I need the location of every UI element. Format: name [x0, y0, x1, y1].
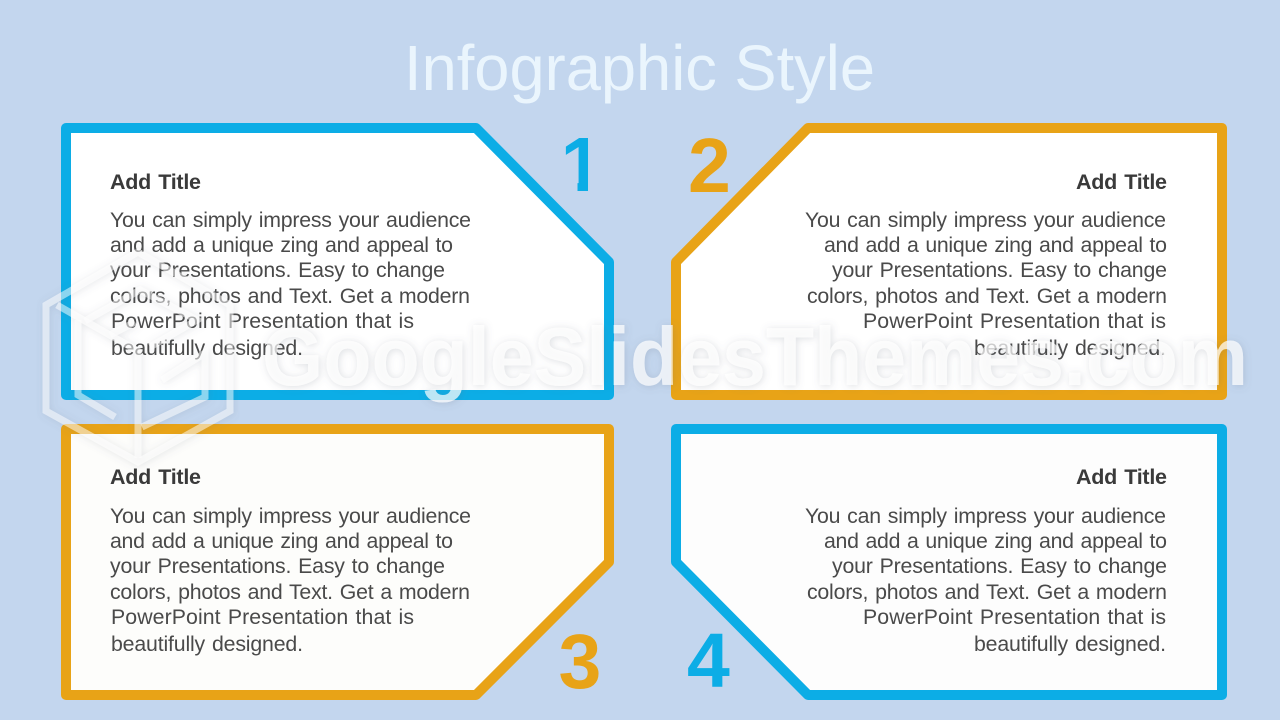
panel 1 body text: and add a unique zing and appeal to: [110, 233, 453, 257]
panel 2 body text: beautifully designed.: [974, 336, 1166, 360]
panel 3: [66, 429, 609, 705]
panel 4 body text: your Presentations. Easy to change: [832, 554, 1167, 578]
panel 1 heading: Add Title: [110, 170, 201, 194]
panel 2 number: 2: [688, 123, 731, 209]
panel 2 outline: [676, 128, 1222, 395]
panel 1 body text: You can simply impress your audience: [110, 208, 471, 232]
panel 2 body text: PowerPoint Presentation that is: [863, 309, 1166, 333]
panel 2 body text: You can simply impress your audience: [805, 208, 1166, 232]
panel 4 body text: colors, photos and Text. Get a modern: [807, 580, 1167, 604]
panel 1: [66, 122, 609, 395]
panel 4: [676, 429, 1222, 704]
panel 4 body text: PowerPoint Presentation that is: [863, 605, 1166, 629]
panel 1 body text: beautifully designed.: [111, 336, 303, 360]
panel 1 body text: [110, 208, 471, 360]
panel 1 body text: colors, photos and Text. Get a modern: [110, 284, 470, 308]
panel 2 body text: and add a unique zing and appeal to: [824, 233, 1167, 257]
panel 1 body text: your Presentations. Easy to change: [110, 258, 445, 282]
panel 2 body text: your Presentations. Easy to change: [832, 258, 1167, 282]
panel 3 body text: [110, 504, 471, 656]
panel 3 outline: [66, 429, 609, 695]
panel 4 outline: [676, 429, 1222, 695]
panel 3 number: 3: [558, 619, 601, 705]
panel 3 heading: Add Title: [110, 465, 201, 489]
watermark text: GoogleSlidesThemes.com: [262, 310, 1248, 403]
panel 4 body text: beautifully designed.: [974, 632, 1166, 656]
panel 3 body text: You can simply impress your audience: [110, 504, 471, 528]
panel 4 body text: [805, 504, 1167, 656]
panel 2 body text: colors, photos and Text. Get a modern: [807, 284, 1167, 308]
panel 2 heading: Add Title: [1076, 170, 1167, 194]
panel 4 number: 4: [687, 618, 730, 704]
panel 3 body text: beautifully designed.: [111, 632, 303, 656]
panel 1 body text: PowerPoint Presentation that is: [111, 309, 414, 333]
panel 2 body text: [805, 208, 1167, 360]
panel 1 outline: [66, 128, 609, 395]
panel 2: [676, 123, 1222, 395]
panel 3 body text: colors, photos and Text. Get a modern: [110, 580, 470, 604]
panel 4 body text: and add a unique zing and appeal to: [824, 529, 1167, 553]
watermark logo: [46, 252, 230, 462]
panel 3 body text: your Presentations. Easy to change: [110, 554, 445, 578]
panel 3 body text: and add a unique zing and appeal to: [110, 529, 453, 553]
panel 4 heading: Add Title: [1076, 465, 1167, 489]
panel 4 body text: You can simply impress your audience: [805, 504, 1166, 528]
title: Infographic Style: [404, 32, 875, 104]
panel 1 number: 1: [561, 122, 603, 208]
panel 3 body text: PowerPoint Presentation that is: [111, 605, 414, 629]
